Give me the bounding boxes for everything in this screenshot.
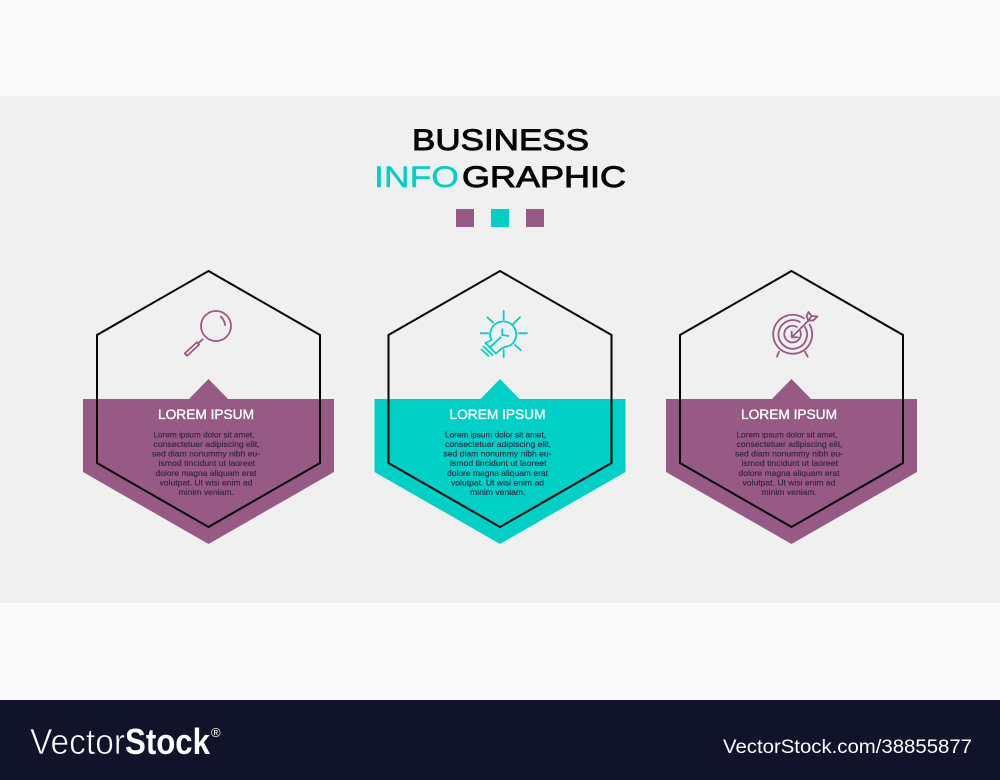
body text [152,430,260,497]
background panel [0,96,1000,603]
hexagon outline [680,271,903,527]
footer bar [0,700,1000,780]
body text: consectetuer adipiscing elit, [154,440,260,449]
body text: dolore magna aliquam erat [738,469,840,478]
body text: ismod tincidunt ut laoreet [158,459,256,468]
heading: LOREM IPSUM [450,407,546,422]
hexagon outline [388,271,612,527]
body text [735,430,843,497]
ribbon: purple [83,379,334,544]
icon: magnifying glass [185,311,231,356]
title [374,124,626,194]
body text: Lorem ipsum dolor sit amet, [154,430,254,439]
panel: step 2 [374,271,626,544]
logo wordmark: ® [211,725,221,740]
body text: sed diam nonummy nibh eu- [152,450,260,459]
body text: Lorem ipsum dolor sit amet, [445,430,546,439]
body text: consectetuer adipiscing elit, [736,440,842,449]
logo wordmark [30,721,221,762]
body text: dolore magna aliquam erat [447,469,549,478]
title: INFO [374,161,459,194]
body text: volutpat. Ut wisi enim ad [742,478,836,487]
body text: ismod tincidunt ut laoreet [742,459,839,468]
icon: target with arrow [773,312,818,357]
body text: sed diam nonummy nibh eu- [444,450,552,459]
title: BUSINESS [412,124,589,157]
body text: volutpat. Ut wisi enim ad [160,478,253,487]
body text: dolore magna aliquam erat [156,469,257,478]
panel: step 3 [666,271,917,544]
heading: LOREM IPSUM [158,407,254,422]
body text: minim veniam. [762,488,817,497]
body text: sed diam nonummy nibh eu- [735,450,843,459]
decorative squares row [456,209,544,227]
title: GRAPHIC [462,161,626,194]
image id text: VectorStock.com/38855877 [723,737,972,758]
ribbon: teal [374,379,626,544]
body text [444,430,552,497]
logo wordmark: Stock [125,721,211,762]
body text: minim veniam. [470,488,526,497]
body text: minim veniam. [178,488,234,497]
body text: Lorem ipsum dolor sit amet, [736,430,838,439]
logo wordmark: Vector [30,721,125,762]
heading: LOREM IPSUM [741,407,837,422]
ribbon: purple [666,379,917,544]
body text: consectetuer adipiscing elit, [445,440,551,449]
hexagon outline [97,271,320,527]
icon: light bulb with clock [481,311,527,357]
panel: step 1 [83,271,334,544]
body text: ismod tincidunt ut laoreet [450,459,547,468]
body text: volutpat. Ut wisi enim ad [451,478,544,487]
